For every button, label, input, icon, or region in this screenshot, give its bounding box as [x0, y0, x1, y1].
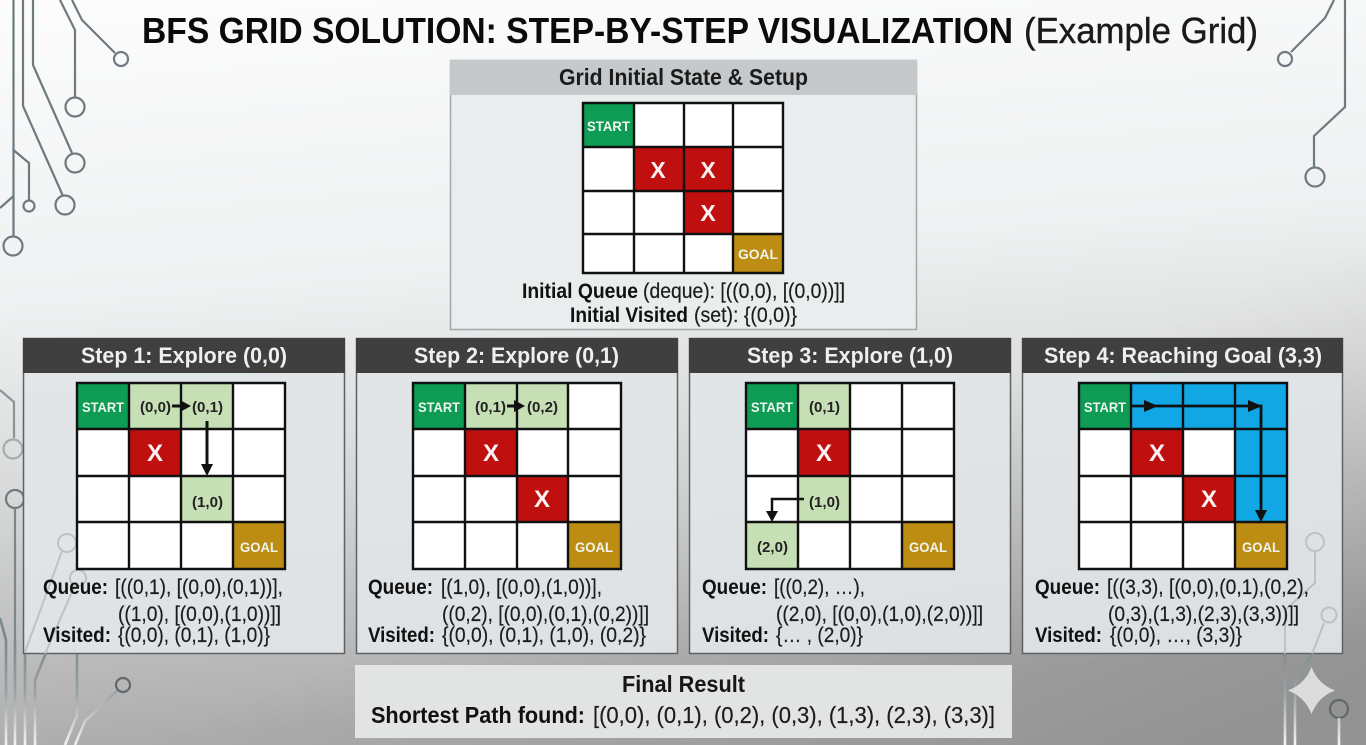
text: step 4 queue and visited	[1035, 576, 1309, 647]
grid: initial state: START	[587, 118, 630, 134]
grid: step 1: START	[82, 399, 124, 415]
heading: final result: Final Result	[622, 671, 745, 697]
grid: initial state: X	[700, 157, 716, 183]
heading: step 2	[356, 338, 678, 373]
grid: step 3: (2,0)	[757, 539, 788, 556]
heading: step 3	[689, 338, 1011, 373]
grid: step 1: X	[147, 440, 163, 467]
text: step 3 queue and visited	[702, 576, 983, 647]
arrow: (0,1) to (0,2)	[507, 400, 525, 412]
grid: initial state: X	[700, 200, 716, 226]
text: step 3 queue and visited: Queue:	[702, 576, 767, 599]
grid: step 4: X	[1149, 440, 1165, 467]
grid: step 2: (0,1)	[475, 399, 506, 416]
text: step 4 queue and visited: Visited:	[1035, 624, 1102, 647]
grid: step 3: GOAL	[909, 539, 947, 555]
panel: step 2	[356, 338, 678, 654]
circuit decoration: lower right	[1285, 654, 1348, 745]
text: shortest path: Shortest Path found:	[371, 702, 585, 728]
panel: step 4	[1022, 338, 1343, 654]
text: step 2 queue and visited: [(1,0), [(0,0),(1,0))],	[441, 576, 602, 599]
heading: step 1: Step 1: Explore (0,0)	[81, 343, 287, 368]
grid: step 1: (0,0)	[140, 399, 171, 416]
grid: step 4: GOAL	[1242, 539, 1280, 555]
text: step 4 queue and visited: [((3,3), [(0,0),(0,1),(0,2),	[1107, 576, 1309, 599]
grid: step 4	[1079, 383, 1287, 569]
grid: initial state: X	[650, 157, 666, 183]
grid: step 1	[77, 383, 285, 569]
heading: step 2: Step 2: Explore (0,1)	[414, 343, 619, 368]
grid: step 3	[746, 383, 954, 569]
grid: initial state: GOAL	[738, 246, 778, 262]
arrow: (1,0) to (2,0)	[766, 499, 804, 522]
heading: step 4	[1022, 338, 1343, 373]
text: shortest path	[371, 702, 995, 728]
grid: step 3: (1,0)	[809, 494, 840, 511]
text: step 4 queue and visited: Queue:	[1035, 576, 1100, 599]
text: step 2 queue and visited: Visited:	[368, 624, 435, 647]
grid: step 1: GOAL	[240, 539, 278, 555]
grid: step 1: (1,0)	[192, 494, 223, 511]
text: step 3 queue and visited: Visited:	[702, 624, 769, 647]
grid: step 2	[413, 383, 621, 569]
text: initial queue and visited: (deque): [((0,0), [(0,0))]]	[643, 280, 845, 303]
heading: step 3: Step 3: Explore (1,0)	[747, 343, 953, 368]
text: step 4 queue and visited: (0,3),(1,3),(2,3),(3,3))]]	[1108, 603, 1299, 626]
panel: final result	[355, 665, 1012, 738]
grid: step 1: (0,1)	[192, 399, 223, 416]
arrow: (0,0) to (0,1)	[172, 400, 191, 412]
text: step 3 queue and visited: {… , (2,0)}	[776, 624, 863, 647]
text: step 1 queue and visited: Visited:	[43, 624, 111, 647]
text: step 1 queue and visited: ((1,0), [(0,0),(1,0))]]	[118, 603, 281, 626]
text: initial queue and visited: Initial Visited	[570, 304, 688, 327]
icon: sparkle star	[1288, 667, 1335, 714]
arrow: shortest path to goal	[1132, 400, 1267, 522]
panel: grid initial state and setup	[450, 60, 917, 330]
circuit decoration: top left	[0, 0, 128, 256]
heading: step 4: Step 4: Reaching Goal (3,3)	[1044, 343, 1322, 368]
text: step 1 queue and visited: Queue:	[43, 576, 108, 599]
panel: step 3	[689, 338, 1011, 654]
grid: step 2: X	[534, 486, 550, 513]
text: step 1 queue and visited: [((0,1), [(0,0),(0,1))],	[115, 576, 283, 599]
grid: step 4: START	[1084, 399, 1126, 415]
circuit decoration: top right	[1278, 0, 1345, 186]
grid: step 2: X	[483, 440, 499, 467]
text: step 3 queue and visited: ((2,0), [(0,0),(1,0),(2,0))]]	[776, 603, 983, 626]
heading: initial state: Grid Initial State & Setup	[559, 64, 808, 90]
text: step 2 queue and visited: {(0,0), (0,1), (1,0), (0,2)}	[442, 624, 646, 647]
grid: step 3: (0,1)	[809, 399, 840, 416]
title: (Example Grid)	[1024, 10, 1258, 51]
heading: initial state	[450, 60, 917, 95]
text: step 1 queue and visited: {(0,0), (0,1), (1,0)}	[118, 624, 270, 647]
text: step 2 queue and visited	[368, 576, 649, 647]
text: initial queue and visited: (set): {(0,0)}	[694, 304, 797, 327]
grid: step 2: (0,2)	[527, 399, 558, 416]
text: step 4 queue and visited: {(0,0), …, (3,3)}	[1110, 624, 1242, 647]
heading: step 1	[23, 338, 345, 373]
text: step 2 queue and visited: ((0,2), [(0,0),(0,1),(0,2))]]	[442, 603, 649, 626]
grid: initial state	[583, 103, 783, 273]
panel: step 1	[23, 338, 345, 654]
text: shortest path: [(0,0), (0,1), (0,2), (0,3), (1,3), (2,3), (3,3)]	[593, 702, 995, 728]
grid: step 2: START	[418, 399, 460, 415]
text: initial queue and visited: Initial Queue	[522, 280, 638, 303]
text: step 3 queue and visited: [((0,2), …),	[774, 576, 865, 599]
text: initial queue and visited	[522, 280, 845, 327]
grid: step 3: START	[751, 399, 793, 415]
arrow: (0,1) to (1,0)	[201, 421, 213, 476]
text: step 2 queue and visited: Queue:	[368, 576, 433, 599]
grid: step 2: GOAL	[575, 539, 613, 555]
circuit decoration: lower left	[0, 390, 130, 745]
grid: step 3: X	[816, 440, 832, 467]
title: BFS GRID SOLUTION: STEP-BY-STEP VISUALIZATION	[142, 10, 1013, 51]
grid: step 4: X	[1201, 486, 1217, 513]
text: step 1 queue and visited	[43, 576, 283, 647]
